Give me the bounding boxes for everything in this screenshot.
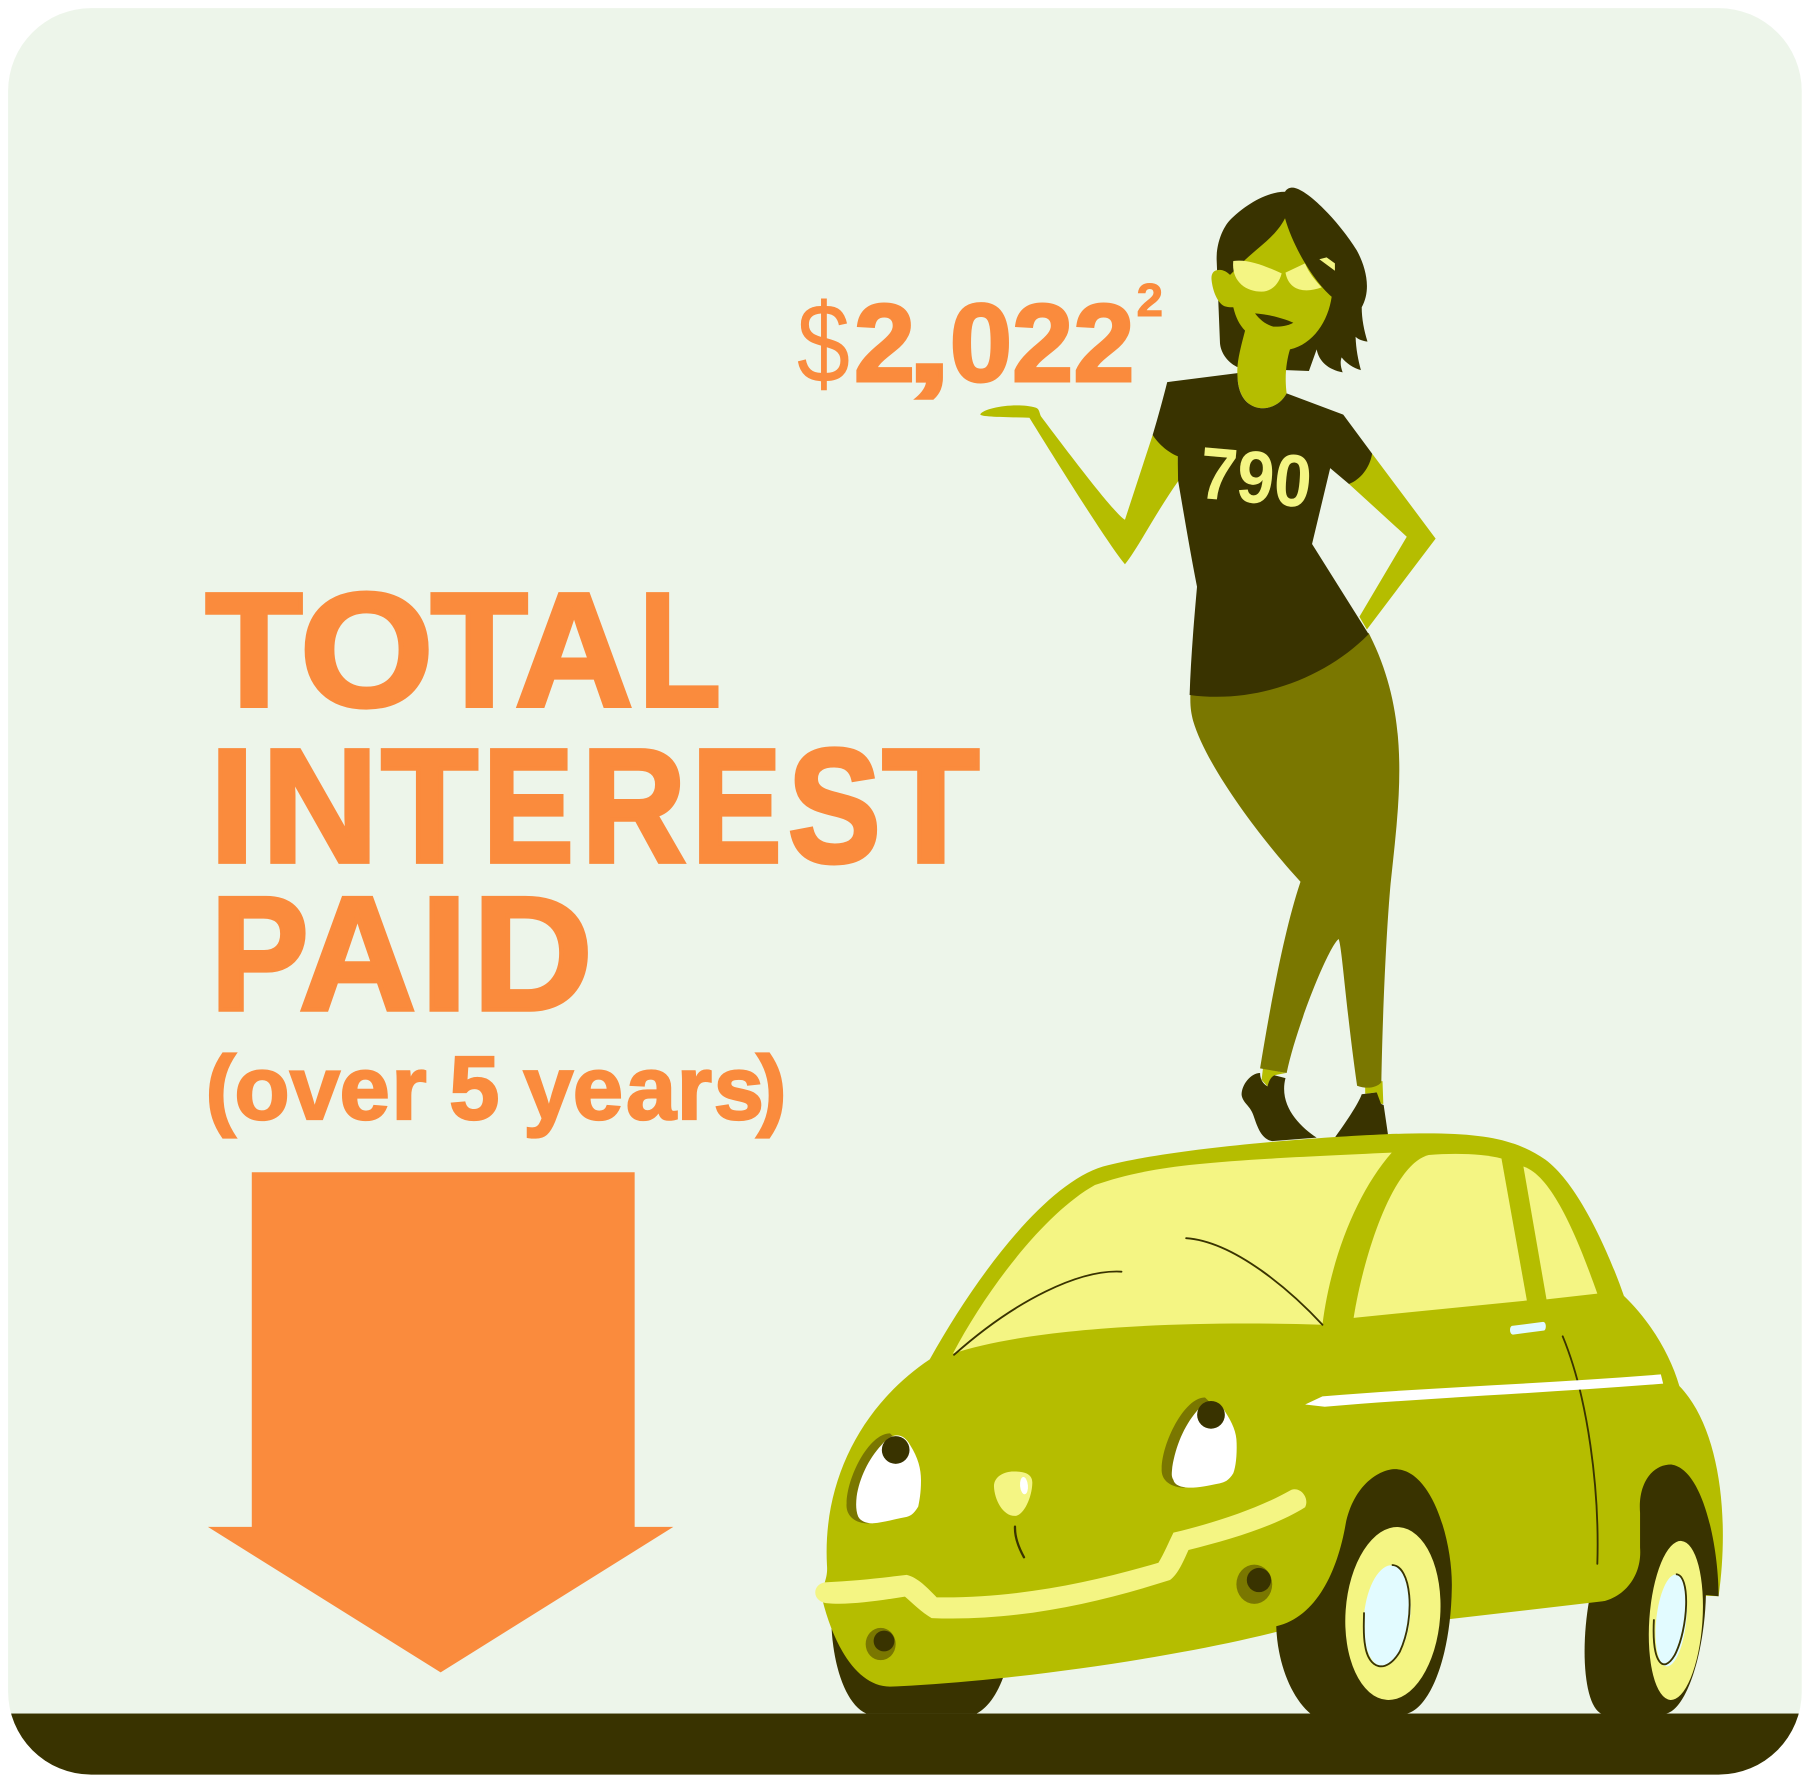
amount: $2,022 with footnote (797, 274, 1163, 406)
left eye (846, 1433, 921, 1523)
amount: $2,022 with footnote: 2 (1012, 282, 1073, 405)
car (815, 1133, 1723, 1714)
rear wheel (1586, 1465, 1719, 1714)
subheading: over 5 years: (over 5 years) (206, 1038, 787, 1139)
amount: $2,022 with footnote: , (907, 282, 952, 405)
left arm with open hand (980, 405, 1179, 564)
heading: total interest paid: A (515, 561, 633, 741)
heading: total interest paid: E (483, 717, 574, 897)
right sock (1365, 1081, 1383, 1104)
ground band (11, 1714, 1799, 1775)
fog light right (1236, 1565, 1272, 1604)
heading: total interest paid: I (210, 717, 254, 897)
amount: $2,022 with footnote: 2 (854, 282, 915, 405)
heading: total interest paid: A (299, 864, 416, 1044)
heading: total interest paid: O (300, 561, 433, 741)
shoes (1242, 1073, 1388, 1141)
amount: $2,022 with footnote: 0 (950, 282, 1012, 405)
shirt number 790: 790 (1196, 431, 1315, 524)
fog light left (866, 1628, 896, 1660)
bumper smile (815, 1489, 1306, 1619)
heading: total interest paid: T (883, 717, 979, 897)
heading: total interest paid: E (692, 717, 781, 897)
hair back (1217, 188, 1367, 372)
sunglasses (1233, 257, 1335, 292)
heading: total interest paid: S (788, 717, 881, 897)
heading: total interest paid: T (381, 717, 478, 897)
rear window (1523, 1167, 1597, 1299)
amount: $2,022 with footnote: $ (797, 280, 850, 406)
heading: total interest paid (206, 561, 979, 1044)
arrow: down (208, 1172, 673, 1672)
amount: $2,022 with footnote: 2 (1136, 274, 1163, 326)
windshield (953, 1153, 1392, 1354)
amount: $2,022 with footnote: 2 (1073, 282, 1134, 405)
rear far tire (1585, 1600, 1686, 1714)
heading: total interest paid: L (639, 561, 721, 741)
door handle (1510, 1322, 1546, 1335)
pants (1190, 633, 1399, 1088)
right eye (1162, 1398, 1237, 1488)
heading: total interest paid: D (473, 864, 593, 1044)
mouth (1255, 313, 1293, 327)
front far tire (832, 1629, 1006, 1714)
car body (822, 1133, 1723, 1687)
heading: total interest paid: N (262, 717, 378, 897)
wiper and door lines (954, 1238, 1598, 1564)
heading: total interest paid: T (431, 561, 528, 741)
left sock (1262, 1068, 1286, 1086)
heading: total interest paid: I (421, 864, 467, 1044)
face and neck (1211, 218, 1332, 408)
woman figure (980, 188, 1436, 1141)
side window (1354, 1154, 1527, 1318)
right arm on hip (1349, 454, 1436, 629)
heading: total interest paid: P (211, 864, 308, 1044)
heading: total interest paid: R (582, 717, 686, 897)
white side stripe (1305, 1374, 1663, 1407)
nose (994, 1471, 1032, 1516)
front wheel (1276, 1469, 1452, 1714)
heading: total interest paid: T (206, 561, 302, 741)
t-shirt (1153, 373, 1372, 697)
